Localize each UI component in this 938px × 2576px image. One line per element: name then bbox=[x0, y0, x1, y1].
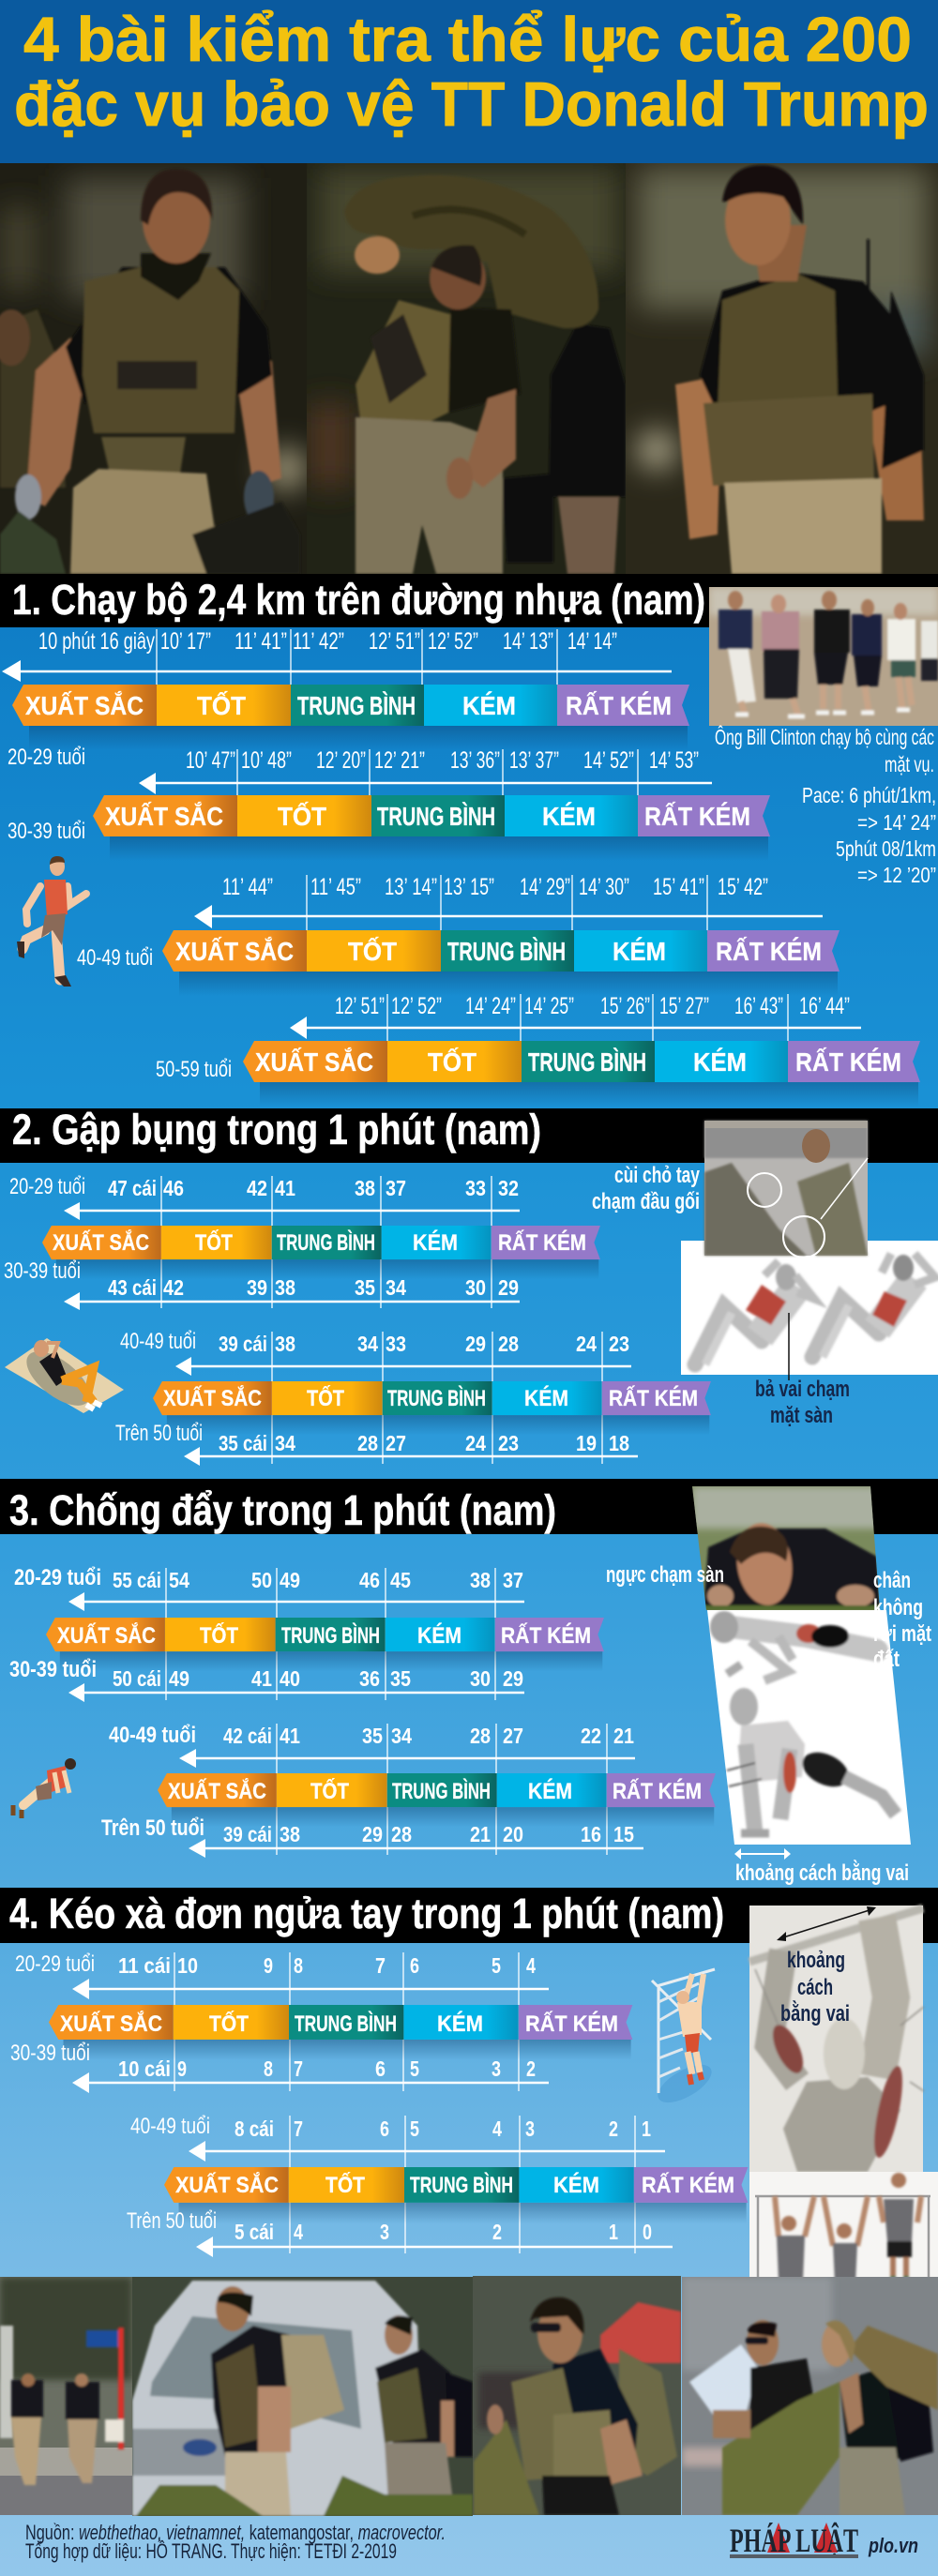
scale: pull-ups 40+: RẤT KÉM bbox=[642, 2172, 734, 2198]
scale: running 20-29: TRUNG BÌNH bbox=[297, 691, 416, 720]
scale: running 50-59 bbox=[243, 993, 920, 1107]
scale: sit-ups 20-39: 46 bbox=[163, 1176, 184, 1200]
age label 50-59: 50-59 tuổi bbox=[156, 1057, 232, 1082]
scale: pull-ups 40+: 3 bbox=[380, 2220, 389, 2244]
age label over 50: Trên 50 tuổi bbox=[127, 2208, 217, 2234]
scale: running 30-39: RẤT KÉM bbox=[644, 802, 750, 831]
scale: running 50-59: 15’ 26” bbox=[600, 993, 650, 1019]
scale: sit-ups 40+: 28 bbox=[357, 1431, 378, 1455]
scale: sit-ups 20-39: 42 bbox=[163, 1275, 184, 1300]
icon: runner bbox=[17, 856, 86, 987]
scale: pull-ups 40+: 8 cái bbox=[234, 2117, 274, 2141]
scale: sit-ups 20-39: 32 bbox=[498, 1176, 519, 1200]
icon: person doing sit-up on mat bbox=[5, 1338, 124, 1416]
scale: pull-ups 20-39: 8 bbox=[294, 1953, 303, 1978]
scale: running 30-39: 13’ 36” bbox=[450, 747, 500, 774]
scale: push-ups 20-39: 40 bbox=[280, 1666, 300, 1691]
logo: Phap Luat bbox=[730, 2522, 858, 2559]
scale: running 40-49: 14’ 30” bbox=[579, 874, 629, 900]
scale: running 20-29: KÉM bbox=[462, 691, 516, 720]
scale: running 20-29: TỐT bbox=[197, 690, 246, 720]
scale: push-ups 20-39: 37 bbox=[503, 1568, 523, 1592]
panel: anatomy sit-up illustration bbox=[681, 1241, 938, 1380]
scale: running 50-59: 14’ 25” bbox=[524, 993, 574, 1019]
scale: push-ups 40+: XUẤT SẮC bbox=[168, 1778, 266, 1804]
scale: push-ups 20-39: 50 cái bbox=[113, 1666, 161, 1691]
scale: sit-ups 20-39: 38 bbox=[355, 1176, 375, 1200]
scale: sit-ups 40+: 33 bbox=[386, 1332, 406, 1356]
heading: section 1: 1. Chạy bộ 2,4 km trên đường nhựa (nam) bbox=[12, 576, 705, 624]
scale: push-ups 40+: 21 bbox=[470, 1822, 491, 1846]
scale: running 20-29: XUẤT SẮC bbox=[25, 691, 144, 720]
heading: section 2 bbox=[0, 1106, 938, 1163]
scale: pull-ups 20-39: 7 bbox=[375, 1953, 386, 1978]
scale: pull-ups 20-39: TỐT bbox=[209, 2011, 249, 2037]
scale: pull-ups 20-39: XUẤT SẮC bbox=[60, 2011, 162, 2037]
scale: push-ups 20-39: KÉM bbox=[417, 1622, 461, 1649]
scale: pull-ups 20-39: 6 bbox=[375, 2056, 386, 2081]
scale: running 40-49: 14’ 29” bbox=[520, 874, 570, 900]
scale: push-ups 40+: 27 bbox=[503, 1724, 523, 1748]
scale: pull-ups 40+: TRUNG BÌNH bbox=[410, 2172, 513, 2198]
scale: pull-ups 20-39: 10 bbox=[177, 1953, 198, 1978]
scale: running 30-39: TRUNG BÌNH bbox=[377, 802, 495, 831]
scale: push-ups 20-39: 38 bbox=[470, 1568, 491, 1592]
scale: push-ups 40+: TRUNG BÌNH bbox=[392, 1778, 491, 1804]
scale: sit-ups 20-39 bbox=[42, 1176, 600, 1310]
annotation: shoulders touching floor bbox=[755, 1377, 850, 1428]
scale: push-ups 40+: 35 bbox=[362, 1724, 383, 1748]
figure: push-up anatomy front view bbox=[727, 1688, 896, 1833]
photo: man doing push-up bbox=[692, 1486, 880, 1610]
scale: pull-ups 40+: TỐT bbox=[325, 2172, 365, 2198]
age label 40-49: 40-49 tuổi bbox=[77, 945, 153, 971]
scale: push-ups 40+: KÉM bbox=[528, 1778, 572, 1804]
illustration: three men doing pull-ups bbox=[749, 2172, 938, 2314]
scale: running 20-29: 10’ 17” bbox=[160, 628, 211, 655]
scale: pull-ups 40+: 5 bbox=[410, 2117, 419, 2141]
scale: running 30-39: 14’ 53” bbox=[649, 747, 699, 774]
scale: running 30-39: 14’ 52” bbox=[583, 747, 634, 774]
scale: pull-ups 20-39: 6 bbox=[410, 1953, 419, 1978]
scale: running 20-29: RẤT KÉM bbox=[566, 691, 672, 720]
scale: sit-ups 20-39: 37 bbox=[386, 1176, 406, 1200]
age label 30-39: 30-39 tuổi bbox=[10, 2041, 90, 2066]
scale: push-ups 40+: 21 bbox=[613, 1724, 634, 1748]
scale: sit-ups 40+: RẤT KÉM bbox=[609, 1385, 698, 1411]
scale: running 40-49: XUẤT SẮC bbox=[175, 937, 294, 966]
annotation: feet off ground: chân bbox=[873, 1568, 911, 1593]
panel: section 1 running bbox=[0, 574, 938, 1107]
illustration: pull-up anatomy sketch bbox=[749, 1906, 924, 2172]
scale: running 40-49: TRUNG BÌNH bbox=[447, 937, 566, 966]
scale: running 40-49: TỐT bbox=[348, 936, 397, 966]
scale: push-ups 40+: 41 bbox=[280, 1724, 300, 1748]
annotation: shoulders touching floor: mặt sàn bbox=[770, 1403, 833, 1428]
scale: running 50-59: 12’ 51” bbox=[335, 993, 385, 1019]
scale: running 50-59: RẤT KÉM bbox=[795, 1047, 901, 1077]
scale: push-ups 40+: 15 bbox=[613, 1822, 634, 1846]
figure: sit-up anatomy right bbox=[812, 1254, 935, 1357]
scale: push-ups 20-39: XUẤT SẮC bbox=[57, 1622, 156, 1649]
scale: pull-ups 40+ bbox=[164, 2116, 748, 2257]
panel: section 3 push-ups bbox=[0, 1479, 938, 1886]
scale: running 20-29: 11’ 42” bbox=[293, 628, 344, 655]
credits: Tổng hợp dữ liệu: HỒ TRANG. Thực hiện: TETĐI 2-2019 bbox=[25, 2539, 397, 2563]
scale: running 50-59: 12’ 52” bbox=[391, 993, 442, 1019]
icon: man on wall bars bbox=[652, 1969, 718, 2110]
scale: pull-ups 20-39: TRUNG BÌNH bbox=[295, 2011, 397, 2037]
scale: pull-ups 40+: 2 bbox=[609, 2117, 618, 2141]
scale: sit-ups 20-39: 39 bbox=[247, 1275, 267, 1300]
scale: push-ups 40+: 22 bbox=[581, 1724, 601, 1748]
scale: push-ups 40+: 28 bbox=[391, 1822, 412, 1846]
scale: push-ups 20-39: 50 bbox=[251, 1568, 272, 1592]
scale: sit-ups 40+: 29 bbox=[465, 1332, 486, 1356]
age label 30-39: 30-39 tuổi bbox=[8, 819, 85, 844]
age label 20-29: 20-29 tuổi bbox=[14, 1565, 101, 1590]
scale: sit-ups 40+: 38 bbox=[275, 1332, 295, 1356]
scale: push-ups 40+: 16 bbox=[581, 1822, 601, 1846]
scale: pull-ups 20-39: 3 bbox=[492, 2056, 501, 2081]
photo: agent carrying bag bbox=[307, 163, 626, 574]
annotation: shoulders touching floor: bả vai chạm bbox=[755, 1377, 850, 1402]
scale: sit-ups 40+: TRUNG BÌNH bbox=[387, 1385, 486, 1411]
annotation: shoulder-width grip: bằng vai bbox=[780, 2000, 850, 2026]
scale: running 40-49: KÉM bbox=[613, 937, 666, 966]
scale: running 40-49: 11’ 44” bbox=[222, 874, 273, 900]
scale: pull-ups 40+: 5 cái bbox=[234, 2220, 274, 2244]
scale: sit-ups 40+: 23 bbox=[498, 1431, 519, 1455]
scale: push-ups 20-39: 35 bbox=[390, 1666, 411, 1691]
scale: pull-ups 40+: 1 bbox=[642, 2117, 651, 2141]
scale: sit-ups 40+ bbox=[153, 1332, 711, 1466]
scale: running 40-49: 13’ 14” bbox=[385, 874, 437, 900]
annotation: elbow touching knee bbox=[592, 1163, 700, 1214]
scale: running 40-49 bbox=[162, 874, 840, 996]
scale: running 40-49: RẤT KÉM bbox=[716, 937, 822, 966]
heading: section 3: 3. Chống đẩy trong 1 phút (nam) bbox=[9, 1486, 556, 1534]
photo: agents walking on Trang Tien street bbox=[0, 2277, 132, 2515]
scale: running 50-59: TỐT bbox=[428, 1047, 477, 1077]
scale: running 50-59: TRUNG BÌNH bbox=[528, 1047, 646, 1077]
scale: sit-ups 20-39: TRUNG BÌNH bbox=[277, 1229, 375, 1256]
credits bbox=[25, 2521, 446, 2563]
scale: sit-ups 40+: 19 bbox=[576, 1431, 597, 1455]
scale: push-ups 40+: 39 cái bbox=[223, 1822, 272, 1846]
scale: pull-ups 40+: 0 bbox=[643, 2220, 652, 2244]
scale: pull-ups 20-39: RẤT KÉM bbox=[525, 2011, 618, 2037]
website: plo.vn bbox=[868, 2534, 918, 2557]
scale: pull-ups 20-39: 5 bbox=[492, 1953, 501, 1978]
icon: person doing push-up bbox=[13, 1758, 76, 1818]
scale: running 50-59: KÉM bbox=[693, 1047, 747, 1077]
scale: running 20-29 bbox=[2, 628, 689, 750]
scale: pull-ups 40+: 6 bbox=[380, 2117, 389, 2141]
header: title: 4 bài kiểm tra thể lực của 200 bbox=[23, 5, 912, 75]
scale: pull-ups 40+: 4 bbox=[294, 2220, 303, 2244]
scale: sit-ups 40+: 18 bbox=[609, 1431, 629, 1455]
figure: push-up anatomy side view bbox=[710, 1611, 877, 1680]
age label 40-49: 40-49 tuổi bbox=[120, 1329, 196, 1354]
scale: running 40-49: 15’ 42” bbox=[718, 874, 768, 900]
scale: push-ups 20-39: 49 bbox=[169, 1666, 189, 1691]
annotation: shoulder-width spacing bbox=[734, 1848, 909, 1886]
scale: sit-ups 20-39: 47 cái bbox=[108, 1176, 157, 1200]
annotation: elbow touching knee: chạm đầu gối bbox=[592, 1189, 700, 1214]
scale: sit-ups 20-39: 43 cái bbox=[108, 1275, 157, 1300]
scale: running 30-39: 10’ 47” bbox=[186, 747, 235, 774]
scale: push-ups 40+: TỐT bbox=[310, 1778, 349, 1804]
photo: Bill Clinton jogging with agents bbox=[709, 587, 938, 726]
scale: push-ups 20-39: 55 cái bbox=[113, 1568, 161, 1592]
scale: running 20-29: 14’ 14” bbox=[567, 628, 617, 655]
scale: sit-ups 40+: 39 cái bbox=[219, 1332, 267, 1356]
scale: push-ups 40+: 20 bbox=[503, 1822, 523, 1846]
age label 30-39: 30-39 tuổi bbox=[4, 1258, 81, 1284]
scale: push-ups 20-39: RẤT KÉM bbox=[501, 1622, 591, 1649]
scale: sit-ups 40+: 24 bbox=[465, 1431, 486, 1455]
scale: pull-ups 40+: 3 bbox=[525, 2117, 535, 2141]
annotation: chest touches floor: ngực chạm sàn bbox=[606, 1562, 724, 1588]
scale: push-ups 20-39: 46 bbox=[359, 1568, 380, 1592]
scale: push-ups 20-39: 29 bbox=[503, 1666, 523, 1691]
scale: sit-ups 40+: 28 bbox=[498, 1332, 519, 1356]
scale: sit-ups 20-39: 33 bbox=[465, 1176, 486, 1200]
scale: pull-ups 20-39: 7 bbox=[294, 2056, 303, 2081]
scale: push-ups 20-39: TỐT bbox=[200, 1622, 238, 1649]
scale: sit-ups 40+: 34 bbox=[357, 1332, 378, 1356]
header: title bbox=[0, 0, 938, 163]
age label 20-29: 20-29 tuổi bbox=[8, 745, 85, 770]
scale: pull-ups 40+: 7 bbox=[294, 2117, 303, 2141]
scale: push-ups 40+ bbox=[158, 1724, 716, 1858]
scale: pull-ups 20-39: 9 bbox=[177, 2056, 187, 2081]
annotation: elbow touching knee: cùi chỏ tay bbox=[614, 1163, 700, 1188]
scale: sit-ups 20-39: 38 bbox=[275, 1275, 295, 1300]
scale: sit-ups 40+: KÉM bbox=[524, 1385, 568, 1411]
scale: pull-ups 20-39: 5 bbox=[410, 2056, 419, 2081]
scale: pull-ups 20-39: 11 cái bbox=[118, 1953, 171, 1978]
footer bbox=[25, 2521, 918, 2563]
logo: Phap Luat: PHÁP LUẬT bbox=[730, 2522, 858, 2559]
scale: sit-ups 20-39: RẤT KÉM bbox=[498, 1229, 586, 1256]
scale: pull-ups 20-39: 2 bbox=[526, 2056, 536, 2081]
scale: push-ups 20-39: 45 bbox=[390, 1568, 411, 1592]
scale: push-ups 20-39: 41 bbox=[251, 1666, 272, 1691]
scale: sit-ups 20-39: XUẤT SẮC bbox=[53, 1229, 149, 1256]
figure: sit-up anatomy left bbox=[695, 1261, 814, 1364]
scale: running 50-59: 14’ 24” bbox=[465, 993, 516, 1019]
scale: sit-ups 20-39: 34 bbox=[386, 1275, 406, 1300]
scale: pull-ups 20-39: 4 bbox=[526, 1953, 536, 1978]
scale: pull-ups 40+: 1 bbox=[609, 2220, 618, 2244]
scale: running 40-49: 13’ 15” bbox=[444, 874, 494, 900]
scale: sit-ups 20-39: 29 bbox=[498, 1275, 519, 1300]
scale: running 50-59: XUẤT SẮC bbox=[255, 1047, 373, 1077]
scale: pull-ups 40+: 2 bbox=[492, 2220, 502, 2244]
panel: section 4 pull-ups bbox=[0, 1888, 938, 2314]
scale: running 30-39: 10’ 48” bbox=[241, 747, 292, 774]
scale: push-ups 40+: 42 cái bbox=[223, 1724, 272, 1748]
header: title: đặc vụ bảo vệ TT Donald Trump bbox=[14, 69, 929, 140]
scale: sit-ups 20-39: 42 bbox=[247, 1176, 267, 1200]
age label 20-29: 20-29 tuổi bbox=[9, 1174, 85, 1199]
scale: sit-ups 20-39: 35 bbox=[355, 1275, 375, 1300]
scale: running 20-29: 12’ 52” bbox=[428, 628, 478, 655]
scale: running 20-29: 10 phút 16 giây bbox=[38, 628, 155, 655]
scale: sit-ups 40+: XUẤT SẮC bbox=[163, 1385, 262, 1411]
scale: running 30-39: 13’ 37” bbox=[509, 747, 559, 774]
scale: push-ups 20-39: 49 bbox=[280, 1568, 300, 1592]
scale: push-ups 40+: 34 bbox=[391, 1724, 412, 1748]
scale: running 50-59: 16’ 43” bbox=[734, 993, 783, 1019]
scale: push-ups 20-39 bbox=[46, 1568, 604, 1702]
age label 40-49: 40-49 tuổi bbox=[130, 2114, 210, 2139]
scale: sit-ups 20-39: TỐT bbox=[195, 1229, 233, 1256]
scale: pull-ups 40+: XUẤT SẮC bbox=[175, 2172, 279, 2198]
annotation: shoulder-width grip: khoảng bbox=[787, 1948, 845, 1973]
scale: running 30-39: KÉM bbox=[542, 802, 596, 831]
scale: running 20-29: 11’ 41” bbox=[234, 628, 287, 655]
scale: sit-ups 20-39: 41 bbox=[275, 1176, 295, 1200]
scale: push-ups 40+: 38 bbox=[280, 1822, 300, 1846]
annotation: shoulder-width grip bbox=[780, 1948, 850, 2026]
age label over 50: Trên 50 tuổi bbox=[101, 1815, 204, 1841]
scale: running 20-29: 14’ 13” bbox=[503, 628, 553, 655]
age label 30-39: 30-39 tuổi bbox=[9, 1657, 97, 1682]
caption: Clinton jogging and pace bbox=[715, 724, 936, 887]
scale: sit-ups 40+: 34 bbox=[275, 1431, 295, 1455]
scale: push-ups 20-39: 30 bbox=[470, 1666, 491, 1691]
scale: running 40-49: 11’ 45” bbox=[310, 874, 361, 900]
scale: push-ups 20-39: TRUNG BÌNH bbox=[281, 1622, 380, 1649]
age label 40-49: 40-49 tuổi bbox=[109, 1723, 196, 1748]
scale: pull-ups 20-39: 8 bbox=[264, 2056, 273, 2081]
heading: section 4: 4. Kéo xà đơn ngửa tay trong 1 phút (nam) bbox=[9, 1890, 724, 1937]
photo: agent with tactical vest bbox=[0, 163, 307, 574]
age label 20-29: 20-29 tuổi bbox=[15, 1951, 95, 1977]
scale: sit-ups 40+: 27 bbox=[386, 1431, 406, 1455]
scale: push-ups 40+: 29 bbox=[362, 1822, 383, 1846]
scale: sit-ups 20-39: KÉM bbox=[413, 1229, 458, 1256]
scale: running 30-39: TỐT bbox=[278, 801, 326, 831]
scale: push-ups 20-39: 54 bbox=[169, 1568, 189, 1592]
annotation: feet off ground bbox=[873, 1568, 931, 1672]
scale: running 20-29: 12’ 51” bbox=[369, 628, 420, 655]
heading: section 3 bbox=[0, 1479, 938, 1534]
panel: push-up anatomy bbox=[707, 1610, 911, 1845]
scale: pull-ups 40+: 4 bbox=[492, 2117, 502, 2141]
credits: Nguồn: webthethao, vietnamnet, katemangostar, macrovector. bbox=[25, 2521, 446, 2544]
scale: running 30-39: 12’ 20” bbox=[316, 747, 366, 774]
scale: running 50-59: 16’ 44” bbox=[799, 993, 850, 1019]
scale: sit-ups 40+: 23 bbox=[609, 1332, 629, 1356]
scale: push-ups 40+: 28 bbox=[470, 1724, 491, 1748]
photo: agent looking sideways bbox=[626, 163, 938, 574]
panel: section 2 sit-ups bbox=[0, 1106, 938, 1466]
scale: pull-ups 20-39: KÉM bbox=[437, 2011, 483, 2037]
photo: agent with sunglasses bbox=[473, 2276, 681, 2515]
photo: agents carrying bags bbox=[682, 2277, 938, 2515]
scale: push-ups 40+: RẤT KÉM bbox=[613, 1778, 702, 1804]
scale: sit-ups 40+: TỐT bbox=[307, 1385, 344, 1411]
scale: running 40-49: 15’ 41” bbox=[653, 874, 704, 900]
scale: push-ups 20-39: 36 bbox=[359, 1666, 380, 1691]
scale: running 50-59: 15’ 27” bbox=[659, 993, 709, 1019]
annotation: feet off ground: đất bbox=[873, 1647, 900, 1672]
age label over 50: Trên 50 tuổi bbox=[115, 1421, 203, 1446]
scale: running 30-39 bbox=[93, 747, 770, 861]
scale: running 30-39: 12’ 21” bbox=[374, 747, 425, 774]
scale: running 30-39: XUẤT SẮC bbox=[105, 802, 223, 831]
scale: pull-ups 40+: KÉM bbox=[553, 2172, 599, 2198]
scale: sit-ups 40+: 24 bbox=[576, 1332, 597, 1356]
scale: pull-ups 20-39: 10 cái bbox=[118, 2056, 171, 2081]
annotation: shoulder-width grip: cách bbox=[797, 1975, 833, 2000]
scale: pull-ups 20-39 bbox=[49, 1952, 632, 2093]
photo: soldiers doing sit-ups bbox=[704, 1121, 868, 1258]
heading: section 2: 2. Gập bụng trong 1 phút (nam) bbox=[12, 1106, 541, 1153]
scale: pull-ups 20-39: 9 bbox=[264, 1953, 273, 1978]
scale: sit-ups 40+: 35 cái bbox=[219, 1431, 267, 1455]
scale: sit-ups 20-39: 30 bbox=[465, 1275, 486, 1300]
photo: agents beside a white van bbox=[132, 2277, 473, 2516]
